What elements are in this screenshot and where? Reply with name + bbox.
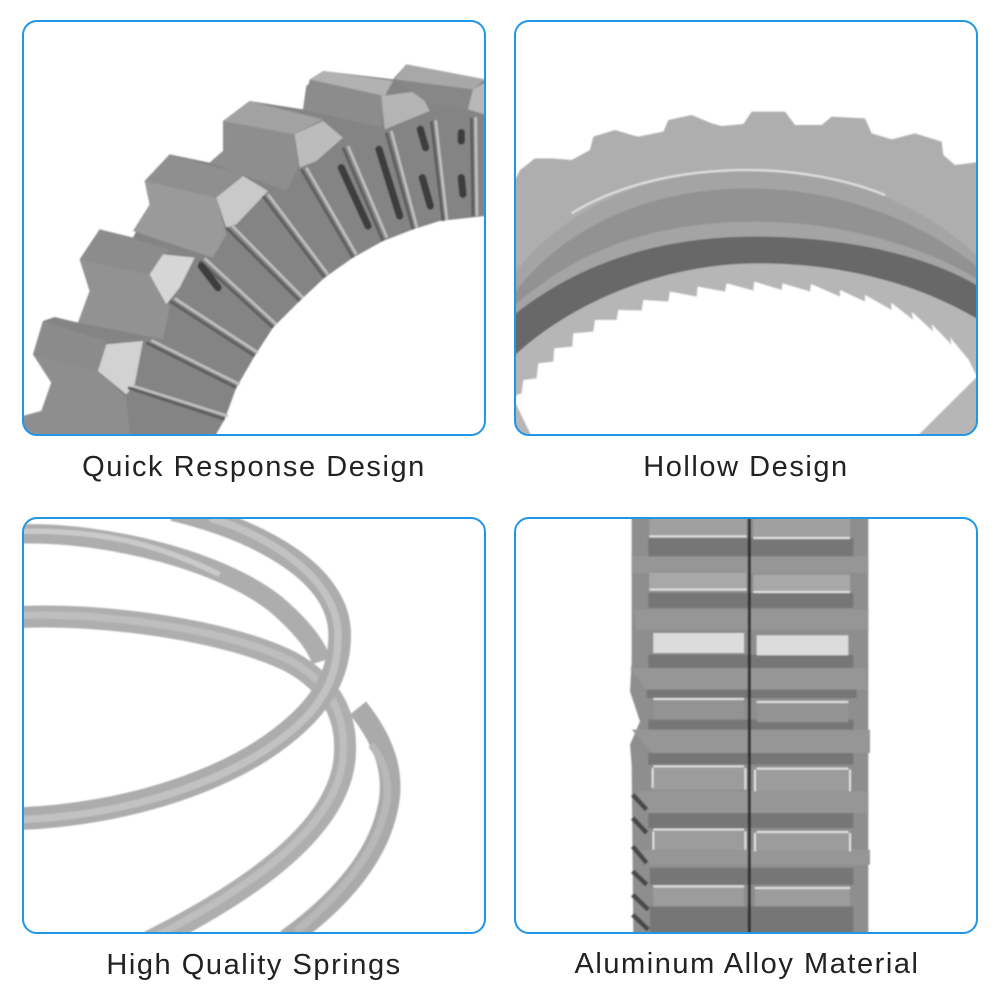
inner lip bbox=[512, 263, 982, 440]
caption: aluminum alloy material: Aluminum Alloy Material bbox=[574, 948, 920, 980]
tooth 1 bbox=[24, 340, 144, 434]
coil D bbox=[286, 708, 390, 940]
gear silhouette bbox=[23, 64, 485, 435]
tooth 2 bbox=[79, 253, 195, 339]
panel: quick response gear bbox=[23, 21, 485, 435]
panel: aluminum gear face bbox=[515, 515, 977, 938]
slat highlights bbox=[133, 117, 477, 416]
panel border bbox=[515, 518, 977, 933]
shadow bands bbox=[647, 538, 857, 938]
coil B bbox=[20, 531, 321, 661]
tooth 5 bbox=[303, 71, 430, 129]
caption: quick response design: Quick Response Design bbox=[82, 451, 426, 483]
dark band bbox=[516, 236, 976, 355]
serrated hole bbox=[515, 282, 977, 440]
panel: hollow ring bbox=[512, 21, 982, 440]
bright edges bbox=[649, 536, 850, 888]
tooth 6 bbox=[395, 64, 485, 114]
panel border bbox=[23, 21, 485, 435]
horizontal bars bbox=[630, 556, 870, 865]
left side hatch bbox=[633, 795, 648, 930]
gear column bbox=[630, 515, 868, 938]
right tooth faces bbox=[753, 515, 850, 906]
slat ridges bbox=[128, 118, 473, 419]
tooth 3 bbox=[133, 154, 268, 258]
rim step bbox=[516, 172, 976, 289]
ring outer with teeth bbox=[516, 110, 976, 272]
dark marks bbox=[201, 129, 463, 288]
left tooth faces bbox=[649, 515, 747, 906]
coil A bbox=[20, 510, 340, 820]
panel border bbox=[23, 518, 485, 933]
bright lip bbox=[516, 222, 976, 314]
caption: hollow design: Hollow Design bbox=[643, 451, 849, 483]
center split bbox=[747, 519, 752, 932]
tooth 4 bbox=[210, 101, 343, 191]
coil C bbox=[20, 615, 345, 941]
panel: springs bbox=[20, 510, 485, 941]
panel border bbox=[515, 21, 977, 435]
recess band bbox=[516, 188, 976, 304]
rim bright edge bbox=[572, 170, 885, 213]
caption: high quality springs: High Quality Springs bbox=[106, 949, 402, 981]
